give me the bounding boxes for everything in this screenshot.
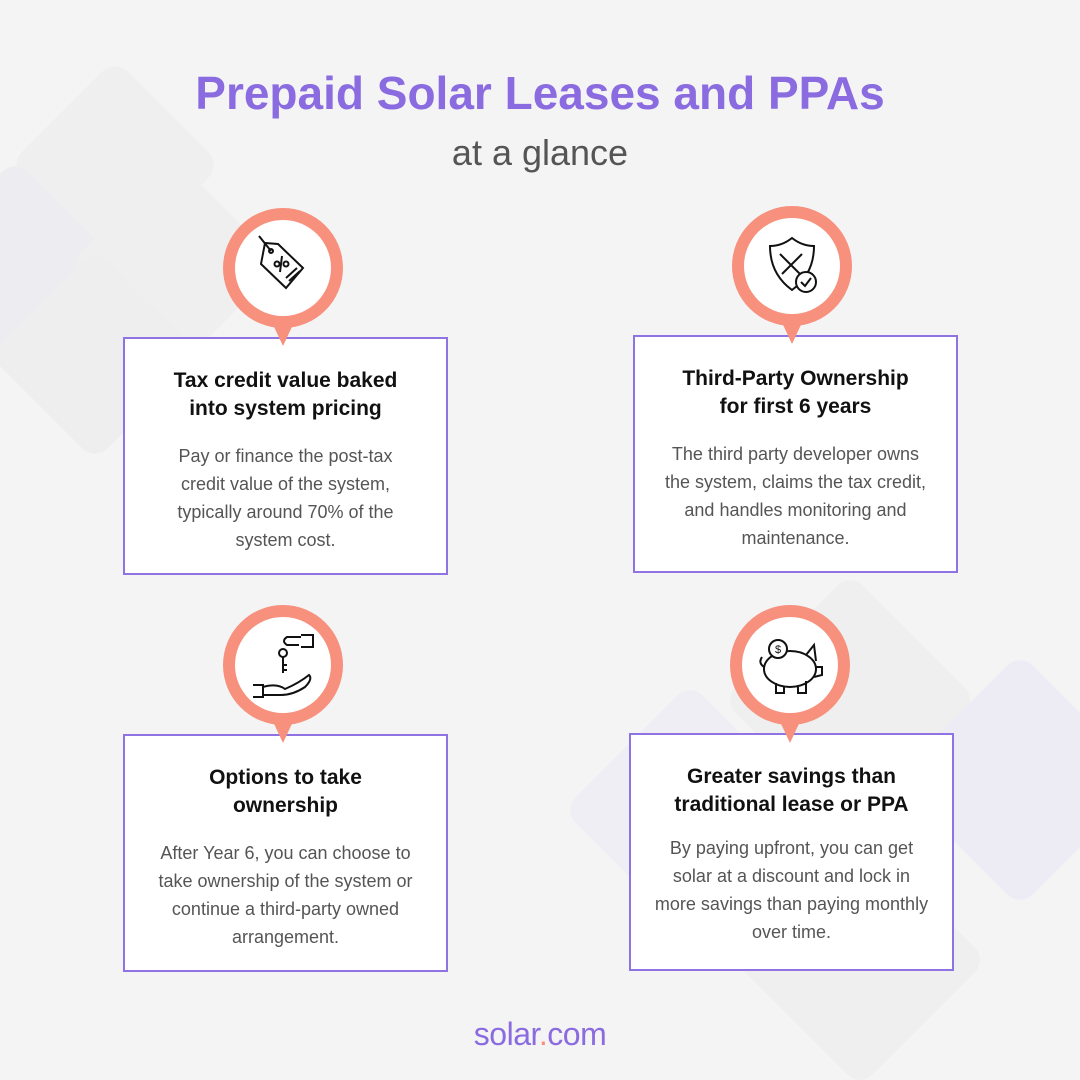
icon pin: key handover [223, 605, 343, 743]
icon pin: price tag [223, 208, 343, 346]
icon pin: shield tools [732, 206, 852, 344]
card: third-party ownership: for first 6 years [720, 395, 871, 418]
card: tax credit: Tax credit value baked [174, 369, 397, 392]
card: tax credit: Pay or finance the post-tax credit value of the system, typically around 70% of the system cost. [177, 446, 394, 550]
subtitle: at a glance [452, 132, 628, 173]
icon pin: piggy bank: $ [775, 644, 781, 656]
icon pin: piggy bank [730, 605, 850, 743]
card: third-party ownership: The third party developer owns the system, claims the tax credit, and handles monitoring and maintenance. [665, 444, 926, 548]
card: options: After Year 6, you can choose to take ownership of the system or continue a third-party owned arrangement. [158, 843, 413, 947]
card: savings [629, 733, 954, 971]
logo: solar.com [474, 1016, 606, 1052]
card: third-party ownership [633, 335, 958, 573]
card: tax credit: into system pricing [189, 397, 382, 420]
card: third-party ownership: Third-Party Ownership [682, 367, 909, 390]
card: options [123, 734, 448, 972]
card: options: ownership [233, 794, 338, 817]
title: Prepaid Solar Leases and PPAs [195, 67, 885, 119]
card: options: Options to take [209, 766, 362, 789]
card: savings: Greater savings than [687, 765, 896, 788]
card: tax credit [123, 337, 448, 575]
card: savings: By paying upfront, you can get solar at a discount and lock in more savings than paying monthly over time. [655, 838, 928, 942]
card: savings: traditional lease or PPA [674, 793, 909, 816]
